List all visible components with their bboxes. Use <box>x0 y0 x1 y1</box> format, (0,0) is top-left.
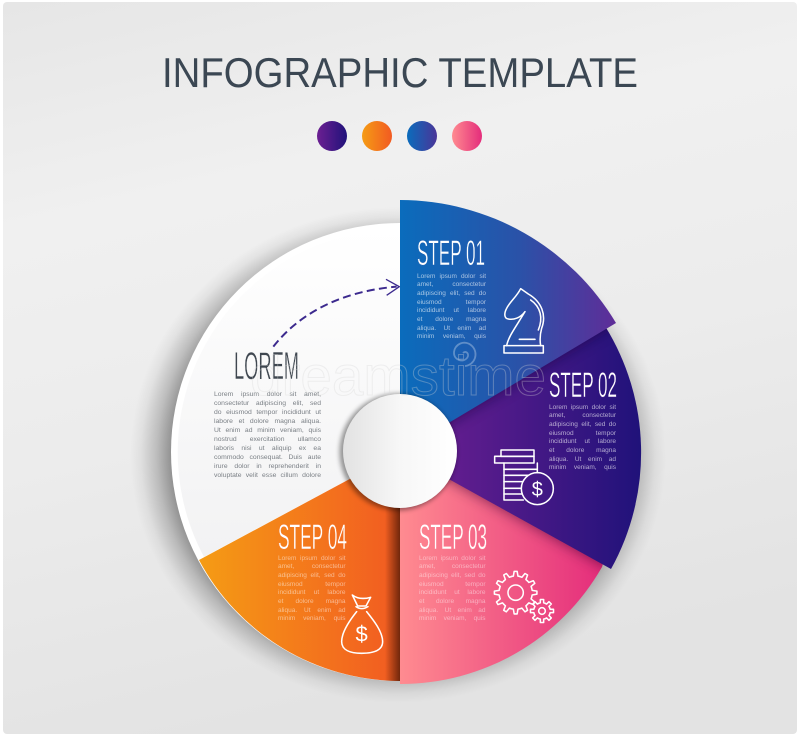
lorem paragraph: do eiusmod tempor incididunt ut <box>214 409 321 416</box>
step 04 paragraph: eiusmod tempor <box>278 581 346 588</box>
panel: step 03 pink <box>400 480 603 684</box>
lorem paragraph: laboris nisi ut aliquip ex ea <box>214 445 321 452</box>
step 03 paragraph: aliqua. Ut enim ad <box>419 607 486 614</box>
watermark: dreamstime <box>250 344 546 407</box>
lorem paragraph: nostrud exercitation ullamco <box>214 436 321 443</box>
step 03 paragraph: Lorem ipsum dolor sit <box>419 555 486 562</box>
step 01 paragraph: Lorem ipsum dolor sit <box>417 273 486 280</box>
step 03 paragraph <box>419 555 486 626</box>
step 01 paragraph: adipiscing elit, sed do <box>417 290 486 297</box>
pie drop shadow <box>130 207 666 703</box>
lorem paragraph: commodo consequat. Duis aute <box>214 454 321 461</box>
panel: step 03 pink: STEP 03 <box>419 518 487 557</box>
title: INFOGRAPHIC TEMPLATE <box>162 49 638 96</box>
panel: step 02 purple <box>449 328 642 569</box>
step 04 paragraph: incididunt ut labore <box>278 589 346 596</box>
icon: money bag <box>342 595 383 653</box>
panel: step 02 purple: STEP 02 <box>549 366 617 405</box>
step 03 paragraph: eiusmod tempor <box>419 581 486 588</box>
step 03 paragraph: adipiscing elit, sed do <box>419 572 486 579</box>
lorem paragraph: consectetur adipiscing elit, sed <box>214 400 321 407</box>
dashed arrow <box>273 279 399 347</box>
step 04 paragraph: et dolore magna <box>278 598 346 605</box>
lorem paragraph: voluptate velit esse cillum dolore <box>214 472 321 479</box>
step 03 paragraph: et dolore magna <box>419 598 486 605</box>
icon: chess knight <box>504 289 544 353</box>
lorem paragraph: labore et dolore magna aliqua. <box>214 418 321 425</box>
lorem paragraph: Ut enim ad minim veniam, quis <box>214 427 321 434</box>
step 01 paragraph: aliqua. Ut enim ad <box>417 325 486 332</box>
step 03 paragraph: amet, consectetur <box>419 563 486 570</box>
icon: money bag: $ <box>356 621 368 646</box>
panel: lorem white segment: LOREM <box>234 345 299 388</box>
step 04 paragraph: minim veniam, quis <box>278 615 346 622</box>
panel: step 01 blue: STEP 01 <box>417 234 485 273</box>
step 03 paragraph: incididunt ut labore <box>419 589 486 596</box>
step 02 paragraph: adipiscing elit, sed do <box>549 421 616 428</box>
panel: step 04 orange <box>199 452 400 681</box>
step 01 paragraph: incididunt ut labore <box>417 307 486 314</box>
step 04 paragraph: aliqua. Ut enim ad <box>278 607 346 614</box>
centre circle <box>340 394 457 510</box>
panel: lorem white segment <box>171 223 629 681</box>
icon: gears <box>494 571 554 623</box>
step 02 paragraph: eiusmod tempor <box>549 430 616 437</box>
step 04 paragraph: amet, consectetur <box>278 563 346 570</box>
lorem paragraph: Lorem ipsum dolor sit amet, <box>214 390 321 398</box>
panel: step 04 orange: STEP 04 <box>278 518 347 557</box>
step 02 paragraph: et dolore magna <box>549 447 616 454</box>
step 02 paragraph: minim veniam, quis <box>549 464 616 471</box>
step 04 paragraph <box>278 555 346 626</box>
step 03 paragraph: minim veniam, quis <box>419 615 486 622</box>
step 01 paragraph: amet, consectetur <box>417 281 486 288</box>
step 02 paragraph: Lorem ipsum dolor sit <box>549 404 616 411</box>
colour dots <box>317 121 482 151</box>
step 01 paragraph: minim veniam, quis <box>417 333 486 340</box>
step 01 paragraph <box>417 273 486 344</box>
step 02 paragraph: amet, consectetur <box>549 412 616 419</box>
step 02 paragraph: incididunt ut labore <box>549 438 616 445</box>
step 04 paragraph: adipiscing elit, sed do <box>278 572 346 579</box>
step 04 paragraph: Lorem ipsum dolor sit <box>278 555 346 562</box>
step 02 paragraph: aliqua. Ut enim ad <box>549 456 616 463</box>
step 02 paragraph <box>549 404 616 475</box>
icon: coins: $ <box>532 479 543 501</box>
lorem paragraph: irure dolor in reprehenderit in <box>214 463 321 470</box>
watermark: dreamstime <box>250 344 546 407</box>
lorem paragraph <box>214 390 321 482</box>
icon: coins <box>495 450 553 505</box>
step 01 paragraph: et dolore magna <box>417 316 486 323</box>
panel: step 01 blue <box>400 200 616 452</box>
step 01 paragraph: eiusmod tempor <box>417 299 486 306</box>
